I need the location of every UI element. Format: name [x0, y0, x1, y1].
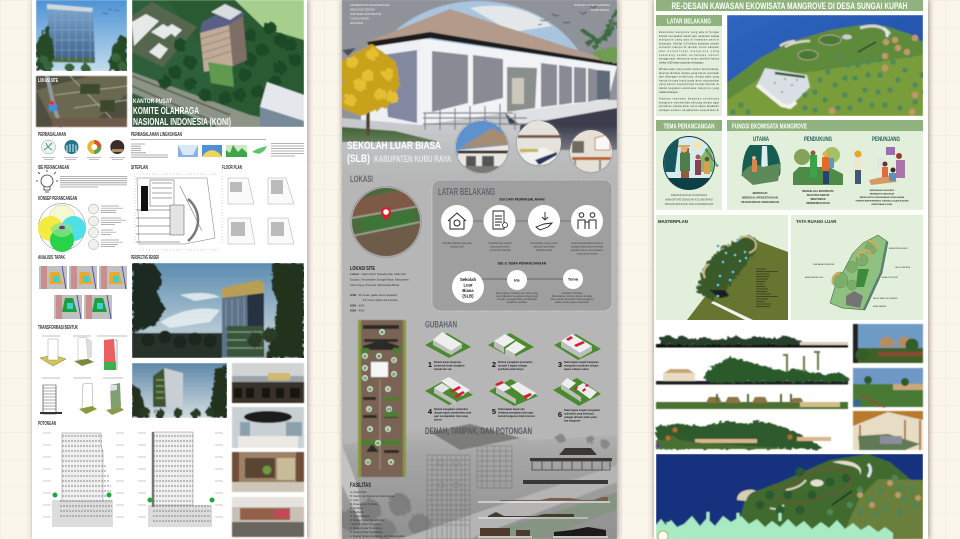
labels: site zones: O	[366, 460, 370, 464]
step 6	[553, 378, 601, 422]
text: background paragraphs: dan ditangani sendirinya, wisata alam yang	[659, 76, 720, 79]
step 5: belakang mengalami adisi agar	[498, 412, 533, 414]
text: background paragraphs	[659, 31, 720, 112]
step 1: 1	[428, 360, 432, 369]
icons: issues	[441, 205, 603, 237]
text: background paragraphs: disertai fasilitas wisata yang belum memadai	[659, 72, 719, 75]
section: transformasi bentuk	[38, 325, 127, 415]
icon: lightbulb	[36, 170, 58, 192]
step 1	[425, 332, 471, 371]
images: pavilion renders	[853, 324, 923, 450]
list: fasilitas: C. Aula	[350, 498, 359, 502]
labels: outdoor zones: AREA PARKIR	[873, 305, 887, 308]
node: ide: Ide	[514, 278, 521, 282]
section: siteplan	[131, 165, 222, 250]
poster header text	[350, 3, 610, 25]
column: utama: PELESTARIAN LINGKUNGAN	[741, 200, 779, 204]
map: location circle	[350, 186, 422, 260]
column: pendukung: MENGELOLA EKOWISATA	[802, 190, 834, 193]
list: fasilitas: K. Ruang Kelas Tunadaksa	[350, 530, 383, 534]
list: fasilitas: FASILITAS	[350, 483, 371, 489]
title: KONI: KANTOR PUSAT	[133, 98, 172, 105]
image: main perspective	[132, 263, 304, 358]
step 2	[488, 333, 534, 371]
step 2: Bentuk mengalami pemisahan	[498, 361, 533, 364]
section: potongan: POTONGAN	[38, 421, 56, 427]
node: sekolah luar biasa	[452, 271, 484, 303]
step 4: agar mendapatkan nilai ruang	[434, 415, 468, 418]
list: fasilitas: B. Kantor dan Bangunan Administrasi	[350, 494, 395, 498]
step 1: Bentuk dasar bangunan	[434, 361, 462, 364]
section: siteplan: SITEPLAN	[131, 165, 148, 171]
column: penunjang: KEBIJAKAN, EDUKATIF	[870, 189, 895, 192]
heading: lokasi: LOKASI	[350, 174, 373, 184]
image: glass tower	[36, 0, 127, 71]
title: SLB: SEKOLAH LUAR BIASA	[347, 140, 441, 152]
panel: tema perancangan: TEMA PERANCANGAN	[664, 124, 714, 130]
section: floor plan: FLOOR PLAN	[222, 165, 242, 171]
section: analisis tapak	[38, 255, 127, 319]
panel: latar belakang: LATAR BELAKANG	[667, 18, 711, 26]
images: interior renders	[232, 363, 304, 537]
list: fasilitas: D. Ruang Luar Terbuka	[350, 502, 378, 506]
column: utama: BERDIKASI	[753, 191, 768, 195]
step 5: 5	[492, 407, 496, 416]
text: theme caption	[665, 193, 714, 206]
captions: ide tema: dengan menggunakan pendekatan	[497, 297, 538, 301]
labels: outdoor zones: JALUR SEPEDA	[895, 266, 911, 269]
column: penunjang: MENDORONG KERJASAMA LINGKUNGAN	[860, 196, 905, 199]
title: SLB	[347, 140, 451, 165]
panel: latar belakang	[432, 180, 612, 311]
labels: site zones: G	[363, 376, 367, 380]
list: fasilitas: J. Ruang Kelas Tunarungu	[350, 526, 382, 530]
text: background paragraphs: penggunaan lahannya belum optimal hanya	[659, 58, 720, 61]
captions: issues	[442, 241, 604, 256]
image: site location map	[36, 76, 127, 127]
labels: site zones: C	[393, 358, 396, 362]
poster header text: RUFAIR LUTHFI KHAIRINA	[574, 3, 610, 7]
poster 2: SLB school	[341, 0, 619, 539]
node: tema: Tema	[568, 276, 579, 282]
list: fasilitas: A. Area Parkir	[350, 490, 367, 494]
captions: issues: sekolah harus menyediakan	[571, 248, 604, 252]
step 4: dengan tujuan memberikan jarak	[434, 412, 472, 414]
labels: site zones: H	[369, 386, 372, 392]
node: sekolah luar biasa: Biasa	[462, 288, 474, 293]
node: sekolah luar biasa: Sekolah	[460, 277, 476, 282]
labels: site zones: F	[364, 366, 367, 370]
captions: ide tema: meningkatkan kesadaran lingkungan	[496, 294, 539, 298]
labels: site zones: B	[378, 354, 381, 358]
massing steps	[425, 332, 601, 422]
section: permasalahan: PERMASALAHAN	[38, 132, 66, 138]
legend: masterplan	[756, 269, 778, 306]
elevation 3	[656, 394, 848, 409]
captions: ide tema: arsitektur perilaku	[507, 300, 528, 304]
text: background paragraphs: dalam kegiatan ekowisata mangrove yang	[659, 87, 720, 90]
labels: site zones: A	[390, 460, 393, 464]
step 4	[425, 377, 473, 422]
node: sekolah luar biasa: Luar	[463, 282, 473, 288]
captions: ide tema: fokus pada kebutuhan bagi pengguna	[550, 297, 594, 301]
section: ide perancangan: IDE PERANCANGAN	[38, 165, 69, 171]
labels: site zones: A	[381, 330, 384, 334]
panel: fungsi ekowisata: FUNGSI EKOWISATA MANGROVE	[732, 124, 807, 130]
drawings: floor plans	[427, 446, 512, 539]
section: permasalahan lingkungan	[131, 132, 304, 157]
step 2: 2	[492, 360, 496, 369]
captions: ide tema: Menerapkan prinsip desain dengan	[552, 294, 593, 298]
step 2: pembeda untuk fungsi	[498, 368, 524, 371]
column: penunjang: TEMPAT BERINTERAKSI, PENGELOLAAN BUDAYA	[855, 200, 909, 202]
step 4: privasi	[434, 418, 442, 422]
captions: issues: kurang baik	[450, 244, 464, 248]
text: background paragraphs: mangrove yang ada di kawasan pesisir	[659, 39, 719, 42]
step 6: Pada bagian tengah mengalami	[564, 409, 600, 412]
captions: ide tema	[496, 291, 594, 304]
text: background paragraphs: dan konservasi mangrove yang	[659, 50, 720, 53]
section: konsep perancangan	[38, 196, 126, 252]
section: potongan	[38, 421, 223, 527]
captions: ide tema: pada perancangan bangunan	[555, 300, 589, 304]
logo: university seal	[658, 531, 668, 539]
image: school building render	[342, 0, 617, 178]
list: fasilitas: I. Ruang Kelas Tunanetra	[350, 522, 381, 526]
poster header text: UNIVERSITAS TANJUNGPURA	[350, 3, 390, 7]
captions: issues: prasarana belum	[490, 244, 510, 248]
panel: masterplan: MASTERPLAN	[658, 219, 688, 224]
step 6: substraksi yang berfungsi	[564, 412, 594, 416]
captions: issues: murid berkebutuhan khusus	[571, 241, 604, 245]
panel: tema perancangan	[656, 120, 722, 210]
captions: issues: memenuhi standar	[489, 248, 511, 252]
poster 3: mangrove ecotourism	[653, 0, 930, 539]
drawing: section B	[138, 432, 223, 527]
step 3: Pada bagian tengah bangunan	[564, 361, 599, 364]
poster header text: D1051181024	[591, 8, 609, 12]
image: second perspective	[132, 363, 227, 418]
node: tema	[563, 269, 583, 289]
poster header text: 2022/2023	[350, 21, 364, 25]
panel: masterplan	[656, 215, 788, 320]
text: background paragraphs: Wisata alam yang masih belum berkembang,	[659, 68, 719, 71]
text: background paragraphs: sekitar 0,05 hektar yang baru terbangun.	[659, 61, 704, 64]
step 1: berbentuk kotak mengikuti	[434, 364, 465, 368]
captions: issues: Fasilitas dan sarana	[488, 241, 512, 245]
text: background paragraphs: kuburaya. Sekitar 0,5 hektar kawasan pesisir	[659, 42, 719, 45]
labels: site zones: I	[387, 386, 389, 392]
section: permasalahan lingkungan: PERMASALAHAN LINGKUNGAN	[131, 132, 182, 138]
text: background paragraphs: Adanya redesain kawasan ekowisata	[659, 98, 720, 100]
heading: gubahan: GUBAHAN	[425, 320, 457, 330]
text: background paragraphs: Kupah merupakan salah satu destinasi wisata	[659, 35, 720, 38]
elevation 4	[656, 421, 831, 449]
list: fasilitas: G. Perpustakaan	[350, 514, 371, 518]
section: floor plan	[222, 165, 294, 244]
text: lokasi site: Kubu Raya, Provinsi Kalimantan Barat	[350, 283, 399, 287]
heading: latar belakang: LATAR BELAKANG	[438, 187, 495, 198]
image: aerial render	[132, 0, 304, 127]
site plan strip	[358, 320, 406, 477]
list: fasilitas: H. Ruang Kelas Tunagrahita	[350, 518, 384, 522]
labels: outdoor zones: AREA PENGELOLA	[805, 276, 824, 279]
text: background paragraphs: sebagai sumber penghasilan masyarakat di	[659, 109, 719, 112]
column: pendukung: PENDUKUNG	[804, 136, 832, 143]
text: lokasi site: LOKASI SITE	[350, 266, 375, 272]
step 6: sebagai sirkulasi udara pada	[564, 416, 597, 419]
image: island render	[727, 15, 925, 116]
step 3: mengalami substraksi dengan	[564, 364, 599, 368]
text: background paragraphs: tersebut mampu di tanami untuk edukasi	[659, 46, 719, 49]
poster 1: KONI office	[32, 0, 309, 539]
panel: latar belakang	[656, 15, 722, 116]
section: permasalahan	[38, 132, 125, 160]
step 3: 3	[558, 360, 562, 369]
labels: site zones: M	[387, 406, 391, 412]
text: background paragraphs: sudah terbangun.	[659, 91, 679, 94]
text: background paragraphs: Ekowisata mangrove yang ada di Sungai	[659, 31, 719, 34]
text: lokasi site: GSB : 20 meter (jalan arteri supadio)	[350, 293, 397, 297]
labels: outdoor zones: AREA OUTBOND	[882, 276, 898, 279]
image: bottom island aerial	[656, 454, 923, 539]
text: theme caption: MANGROVE DENGAN KOLABORASI	[665, 198, 713, 202]
subheading: isu: ISU DAN PERMASALAHAN	[499, 198, 545, 202]
column: penunjang: PENUNJANG	[872, 136, 900, 143]
title: SLB: (SLB)	[347, 153, 370, 165]
column: pendukung	[793, 136, 843, 205]
section: ide perancangan	[36, 165, 127, 192]
step 5	[489, 379, 538, 418]
captions: ide tema: Menerapkan edukasi luar kelas yang	[496, 291, 539, 295]
icons: concept list	[88, 204, 98, 250]
labels: site zones	[362, 329, 397, 465]
drawing: section A	[43, 433, 124, 527]
captions: ide tema: Arsitektur Perilaku	[561, 291, 583, 295]
column: pendukung: MEMBERDAYAKAN	[806, 202, 830, 205]
text: theme caption: PERANCANGAN KAWASAN	[671, 193, 707, 197]
elevations	[656, 335, 848, 449]
labels: site zones: J	[368, 406, 370, 412]
labels: site zones: L	[387, 426, 390, 432]
captions: issues: ruang yang sesuai	[576, 252, 598, 256]
text: lokasi site: KDH : 40%	[350, 308, 365, 312]
text: lokasi site: Sucipto, Kecamatan Sungai Raya, Kabupaten	[350, 278, 409, 282]
captions: issues: berbeda beda	[536, 248, 553, 252]
list: fasilitas	[350, 483, 405, 538]
title: KONI: NASIONAL INDONESIA (KONI)	[133, 117, 231, 128]
text: lokasi site: KDB : 60%	[350, 304, 365, 308]
step 3	[554, 334, 601, 371]
chart: environment data	[178, 145, 267, 157]
text: lokasi site	[350, 266, 409, 312]
elevation 2	[656, 352, 848, 384]
drawings: elevations and sections	[478, 448, 612, 537]
icons: problems	[42, 140, 124, 154]
labels: outdoor zones: DERMAGA PENGINTAI	[813, 263, 835, 266]
labels: outdoor zones	[805, 247, 911, 308]
column: pendukung: MENYIMPAN	[810, 198, 826, 201]
step 1: bentuk dari site	[434, 368, 452, 371]
labels: outdoor zones: AREA PENDUKUNG	[889, 247, 908, 250]
text: theme caption: WISATA EDUKASI DAN KONSERVASI	[665, 202, 714, 206]
step 5: bentuk bangunan tidak monoton	[498, 415, 536, 418]
title: SLB: KABUPATEN KUBU RAYA	[374, 154, 451, 165]
text: background paragraphs: yang belum sepenuhnya berpartisipasi di	[659, 83, 719, 86]
node: ide	[507, 270, 527, 290]
title: KONI	[133, 98, 231, 128]
captions: issues: Kondisi fasilitas yang ada	[442, 241, 472, 245]
column: utama	[741, 136, 781, 204]
text: lokasi site: 15 meter (jalan adi sucipto)	[363, 298, 398, 302]
panel: tata ruang luar: TATA RUANG LUAR	[796, 219, 837, 224]
illustration: ecotourism hikers: EKOTOURISM	[704, 148, 720, 168]
poster header text: JURUSAN ARSITEKTUR	[350, 12, 382, 16]
poster header text: FAKULTAS TEKNIK	[350, 8, 375, 12]
column: penunjang	[854, 136, 909, 206]
section: perspective render	[131, 255, 304, 418]
list: fasilitas: E. Gudang	[350, 506, 363, 510]
list: fasilitas: F. Musholla	[350, 510, 364, 514]
column: utama: UTAMA	[753, 136, 769, 143]
captions: issues: sekolah luar biasa	[534, 244, 555, 248]
subheading: ide dan tema: IDE & TEMA PERANCANGAN	[498, 262, 547, 266]
step 4: Bentuk mengalami substraksi	[434, 408, 468, 411]
elevation 1	[656, 335, 848, 348]
diagram: concept venn	[38, 204, 86, 252]
panel: tata ruang luar	[791, 215, 923, 320]
title: KONI: KOMITE OLAHRAGA	[133, 106, 199, 117]
text: background paragraphs: mangrove memberikan peluang wisata agar	[659, 101, 719, 104]
column: penunjang: MEMBANTU MASUKAN	[870, 192, 895, 196]
captions: issues: dengan kebutuhan berbeda	[571, 244, 603, 248]
column: pendukung: KEGIATAN SERVIS	[807, 194, 830, 197]
node: sekolah luar biasa: (SLB)	[462, 294, 474, 298]
lower background landscape	[342, 424, 617, 539]
panel: fungsi ekowisata	[727, 120, 923, 210]
section: analisis tapak: ANALISIS TAPAK	[38, 255, 65, 261]
text: lokasi site: Lokasi : Jalan Arteri Supadio dan Jalan Adi	[350, 272, 406, 276]
heading: denah tampak potongan: DENAH, TAMPAK, DAN POTONGAN	[425, 426, 532, 437]
labels: site zones: D	[393, 372, 396, 376]
step 3: tujuan sirkulasi udara	[564, 368, 589, 371]
step 6: 6	[558, 410, 562, 419]
labels: site zones: N	[377, 440, 380, 446]
captions: issues: Kebutuhan ruang untuk	[531, 241, 558, 245]
step 6: tiap bangunan	[564, 420, 581, 422]
section: transformasi bentuk: TRANSFORMASI BENTUK	[38, 325, 78, 331]
section: perspective render: PERSPECTIVE RENDER	[131, 255, 159, 261]
text: background paragraphs: hanya berupa track pada area masyarakat	[659, 79, 719, 82]
labels: site zones: E	[364, 354, 367, 358]
text: background paragraphs: sekarang sudah terlampau namun	[659, 54, 720, 57]
text: background paragraphs: pendirian wisata alam serta dapat dijadikan	[659, 105, 720, 108]
labels: site zones: K	[369, 426, 372, 432]
step 2: menjadi 2 bagian sebagai	[498, 364, 527, 368]
step 5: Pada bagian depan dan	[498, 408, 525, 411]
section: konsep perancangan: KONSEP PERANCANGAN	[38, 196, 77, 202]
diagrams: building transformation	[40, 337, 124, 415]
labels: outdoor zones: JALUR KANTONG PARKIR	[873, 297, 898, 300]
list: fasilitas: L. Ruang Terapi, Konseling, dan Keterampilan	[350, 534, 405, 538]
poster header text: TUGAS AKHIR	[350, 16, 369, 20]
column: penunjang: KEMITRAAN LOKAL	[871, 203, 893, 206]
label: location: LOKASI SITE	[38, 78, 58, 84]
column: utama: MENGGALI PENGETAHUAN	[742, 196, 778, 200]
images: circular renders	[455, 120, 614, 174]
step 4: 4	[428, 407, 433, 416]
